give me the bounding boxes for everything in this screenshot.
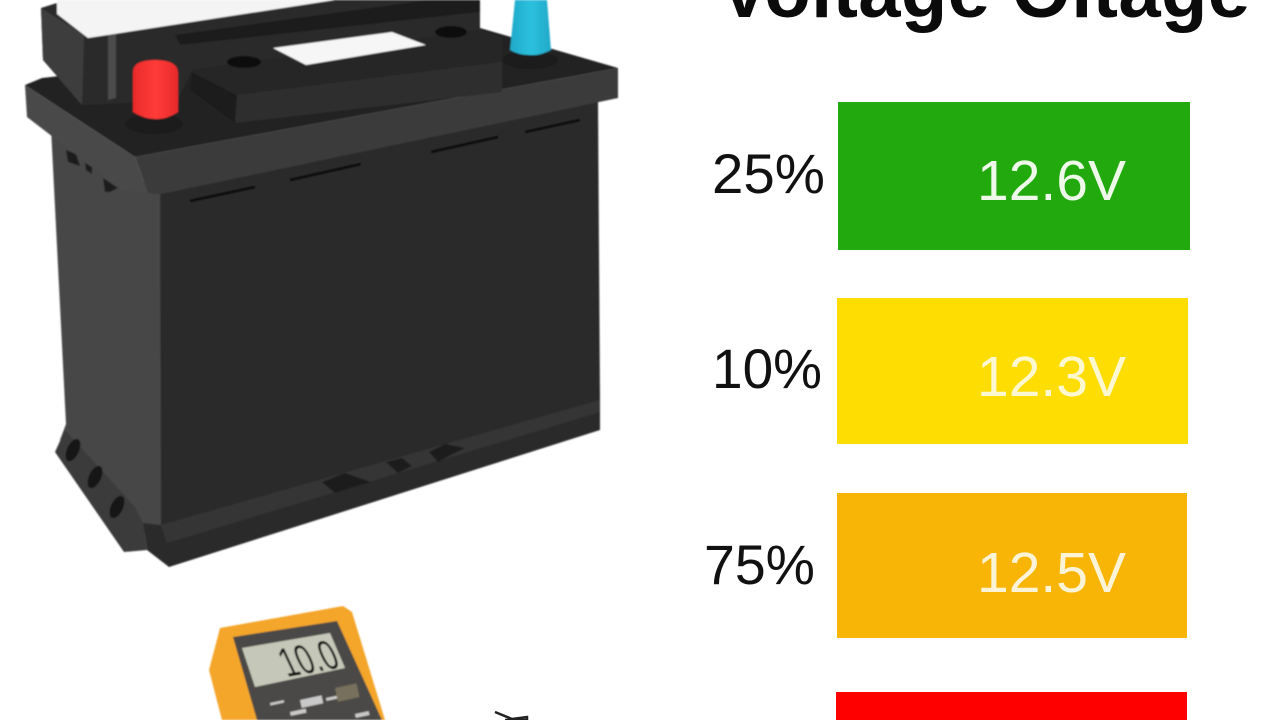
- label 25%: 25%: [712, 142, 825, 205]
- value 12.3V: 12.3V: [977, 345, 1126, 409]
- battery vent slots: [190, 120, 580, 201]
- probe lead: [495, 712, 527, 720]
- row: 10%: [712, 298, 1188, 444]
- battery bottom flange: [55, 397, 600, 567]
- label 10%: 10%: [712, 337, 822, 400]
- white center label: [273, 32, 426, 65]
- battery side notches: [66, 150, 118, 192]
- orange bar: [837, 493, 1187, 638]
- value 12.6V: 12.6V: [977, 149, 1126, 213]
- multimeter screen: [242, 633, 345, 687]
- yellow bar: [837, 298, 1188, 444]
- red positive terminal: [125, 60, 183, 134]
- battery front face: [160, 100, 600, 528]
- multimeter body: [209, 606, 385, 720]
- label 75%: 75%: [704, 533, 815, 596]
- multimeter reading: 10.0: [271, 632, 346, 686]
- battery left side face: [51, 128, 164, 535]
- multimeter: [209, 606, 385, 720]
- row: 25%: [712, 102, 1190, 250]
- value 12.5V: 12.5V: [977, 541, 1126, 605]
- multimeter face: [233, 621, 382, 720]
- multimeter buttons: [270, 693, 370, 718]
- row: 75%: [704, 493, 1187, 638]
- red bar, cropped: [836, 692, 1187, 720]
- battery lid: [25, 28, 618, 194]
- cover holes: [227, 26, 467, 68]
- battery illustration: [25, 0, 618, 567]
- battery raised cover: [190, 30, 502, 123]
- blue negative terminal: [502, 0, 558, 69]
- green bar: [838, 102, 1190, 250]
- battery top block: [41, 0, 480, 105]
- multimeter dial mark: [335, 683, 359, 702]
